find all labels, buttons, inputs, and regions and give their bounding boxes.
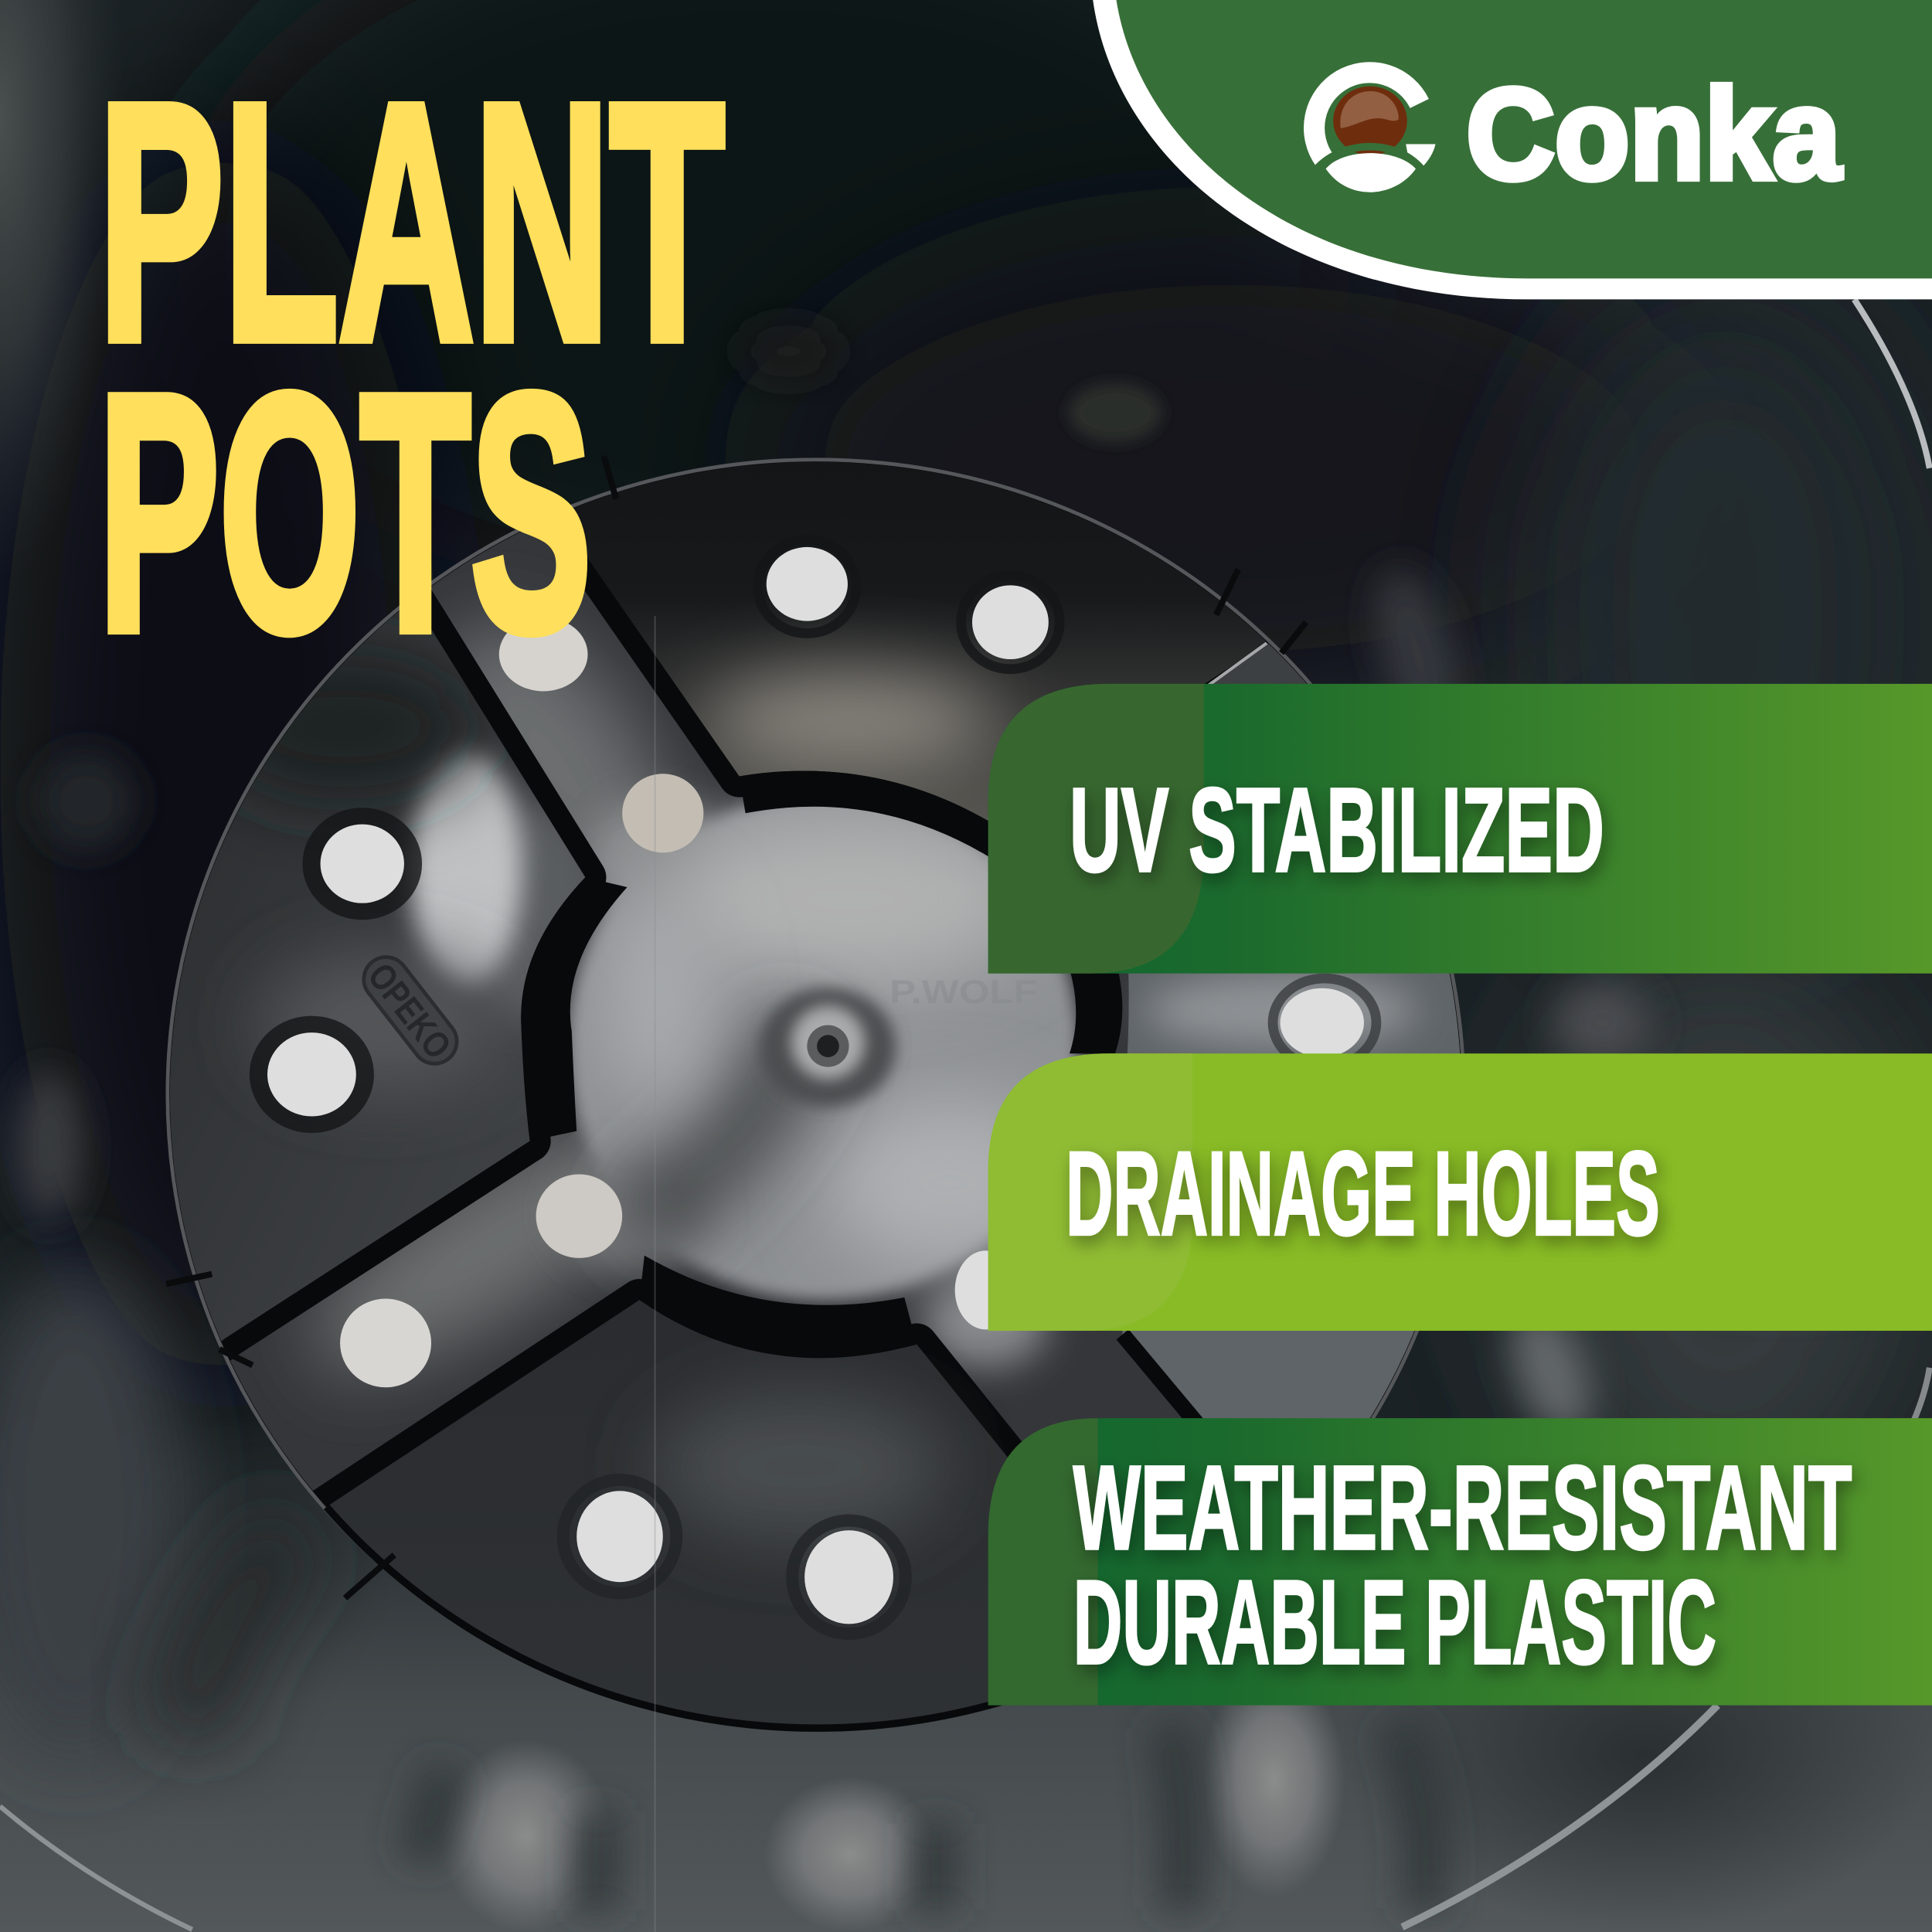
panel green fill xyxy=(1117,0,1932,278)
plate: bottom xyxy=(222,1300,1232,1849)
panel tab xyxy=(988,1053,1192,1331)
panel: UV stabilized xyxy=(988,684,1932,974)
vertical photo seam xyxy=(655,616,656,1932)
disc rim xyxy=(168,460,1464,1729)
logo mark xyxy=(1314,73,1435,192)
arms and hub xyxy=(221,532,1460,1507)
plate: left xyxy=(74,369,604,1405)
panel tab xyxy=(988,684,1204,974)
panel: drainage holes xyxy=(988,1053,1932,1331)
logo panel xyxy=(1093,0,1932,299)
drainage holes xyxy=(259,539,1376,1634)
outer pot rings xyxy=(0,1806,192,1930)
plate: top xyxy=(543,369,1338,823)
panel: weather-resistant durable plastic xyxy=(988,1418,1932,1706)
faint watermark: P.WOLF: P.WOLF xyxy=(889,974,1037,1011)
title line: PLANT: PLANT xyxy=(99,35,725,410)
channels around hub xyxy=(521,770,1122,1358)
rim clips xyxy=(166,456,1306,1598)
plate: right xyxy=(1116,974,1461,1419)
title xyxy=(99,35,725,701)
panel white border xyxy=(1093,0,1932,299)
embossed mark: OPEKO: OPEKO xyxy=(359,956,458,1066)
soft reflections xyxy=(17,1072,81,1219)
lower rim shadow xyxy=(327,1507,1010,1728)
centre nipple xyxy=(760,988,896,1107)
brand name: Conka xyxy=(1466,62,1842,206)
title line: POTS: POTS xyxy=(99,325,591,701)
hole ring shadows xyxy=(259,539,1376,1634)
pot base disc xyxy=(165,455,1464,1732)
panel tab xyxy=(988,1418,1098,1706)
small arm triangle xyxy=(1209,641,1338,685)
central hub xyxy=(568,794,1078,1300)
